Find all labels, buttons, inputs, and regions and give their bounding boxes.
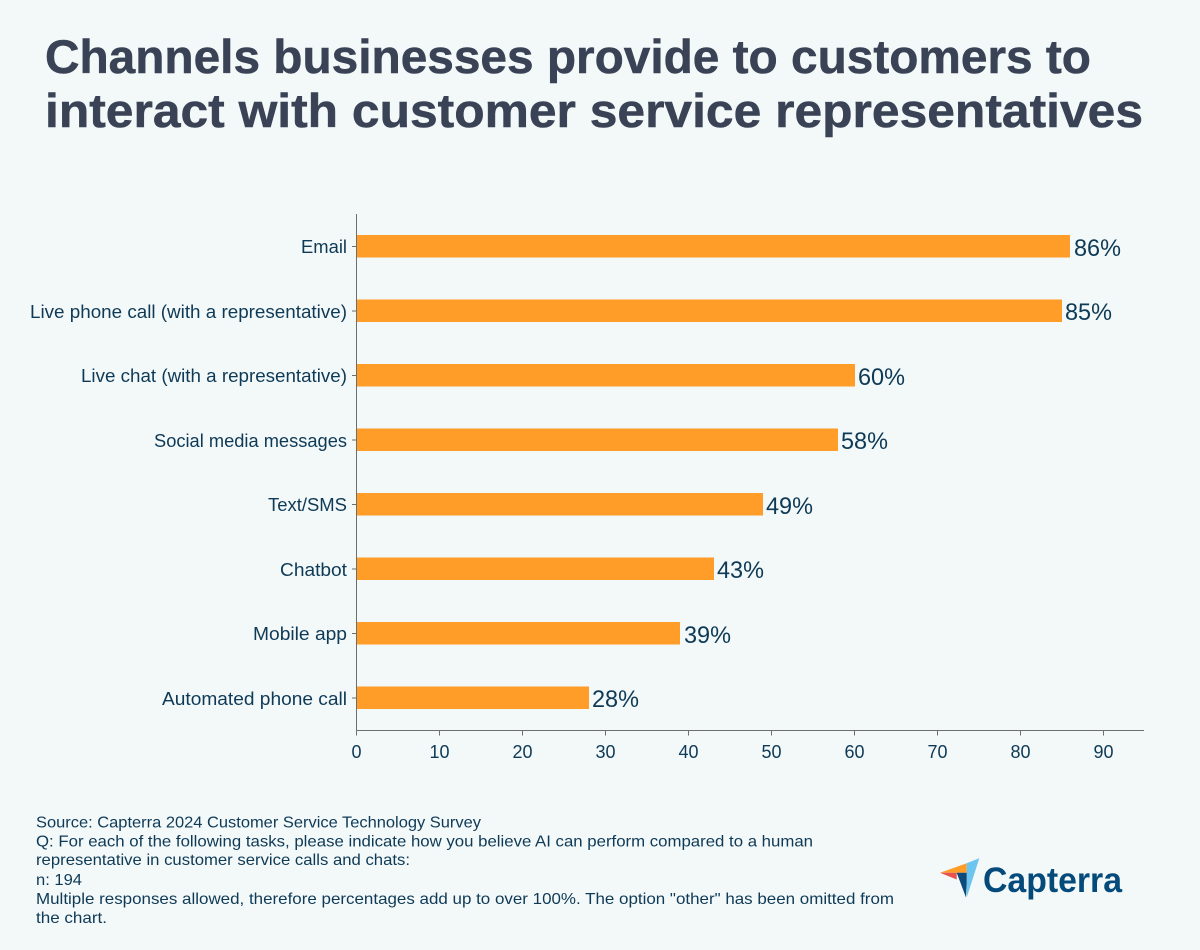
axis tick labels: 0 [351, 742, 362, 762]
value labels: 49% [766, 493, 813, 520]
bar chart [30, 214, 1144, 762]
axis tick labels: 80 [1010, 742, 1031, 762]
axis tick labels: 50 [761, 742, 782, 762]
Capterra logo [940, 858, 1123, 900]
axis tick labels: 10 [429, 742, 450, 762]
category labels: Automated phone call [162, 689, 347, 709]
value labels: 60% [858, 364, 905, 391]
value labels: 39% [684, 622, 731, 649]
category labels [30, 237, 347, 709]
source note: representative in customer service calls and chats: [36, 852, 410, 869]
source note: Multiple responses allowed, therefore percentages add up to over 100%. The option "other" has been omitted from [36, 891, 894, 908]
axis tick labels [351, 742, 1114, 762]
wordmark: Capterra [983, 861, 1123, 900]
axis tick labels: 70 [927, 742, 948, 762]
category labels: Email [301, 237, 347, 257]
category labels: Mobile app [253, 624, 347, 644]
axis tick labels: 60 [844, 742, 865, 762]
axis tick labels: 30 [595, 742, 616, 762]
value labels: 28% [592, 686, 639, 713]
icon: Capterra arrow [940, 858, 979, 898]
axis tick labels: 20 [512, 742, 533, 762]
value labels [592, 235, 1121, 713]
category labels: Live chat (with a representative) [81, 366, 347, 386]
title [45, 31, 1143, 138]
axes [352, 214, 1144, 736]
title: Channels businesses provide to customers to [45, 31, 1091, 84]
category labels: Chatbot [280, 560, 347, 580]
source note: n: 194 [36, 872, 82, 889]
category labels: Social media messages [154, 431, 347, 451]
source note [36, 814, 894, 927]
source note: the chart. [36, 910, 107, 927]
category labels: Live phone call (with a representative) [30, 302, 347, 322]
axis tick labels: 40 [678, 742, 699, 762]
source note: Source: Capterra 2024 Customer Service Technology Survey [36, 814, 481, 832]
value labels: 43% [717, 557, 764, 584]
category labels: Text/SMS [268, 495, 347, 515]
source note: Q: For each of the following tasks, please indicate how you believe AI can perform compared to a human [36, 834, 813, 850]
bars [357, 235, 1070, 709]
value labels: 58% [841, 428, 888, 455]
value labels: 85% [1065, 299, 1112, 326]
title: interact with customer service representatives [45, 85, 1143, 138]
axis tick labels: 90 [1093, 742, 1114, 762]
value labels: 86% [1074, 235, 1121, 262]
